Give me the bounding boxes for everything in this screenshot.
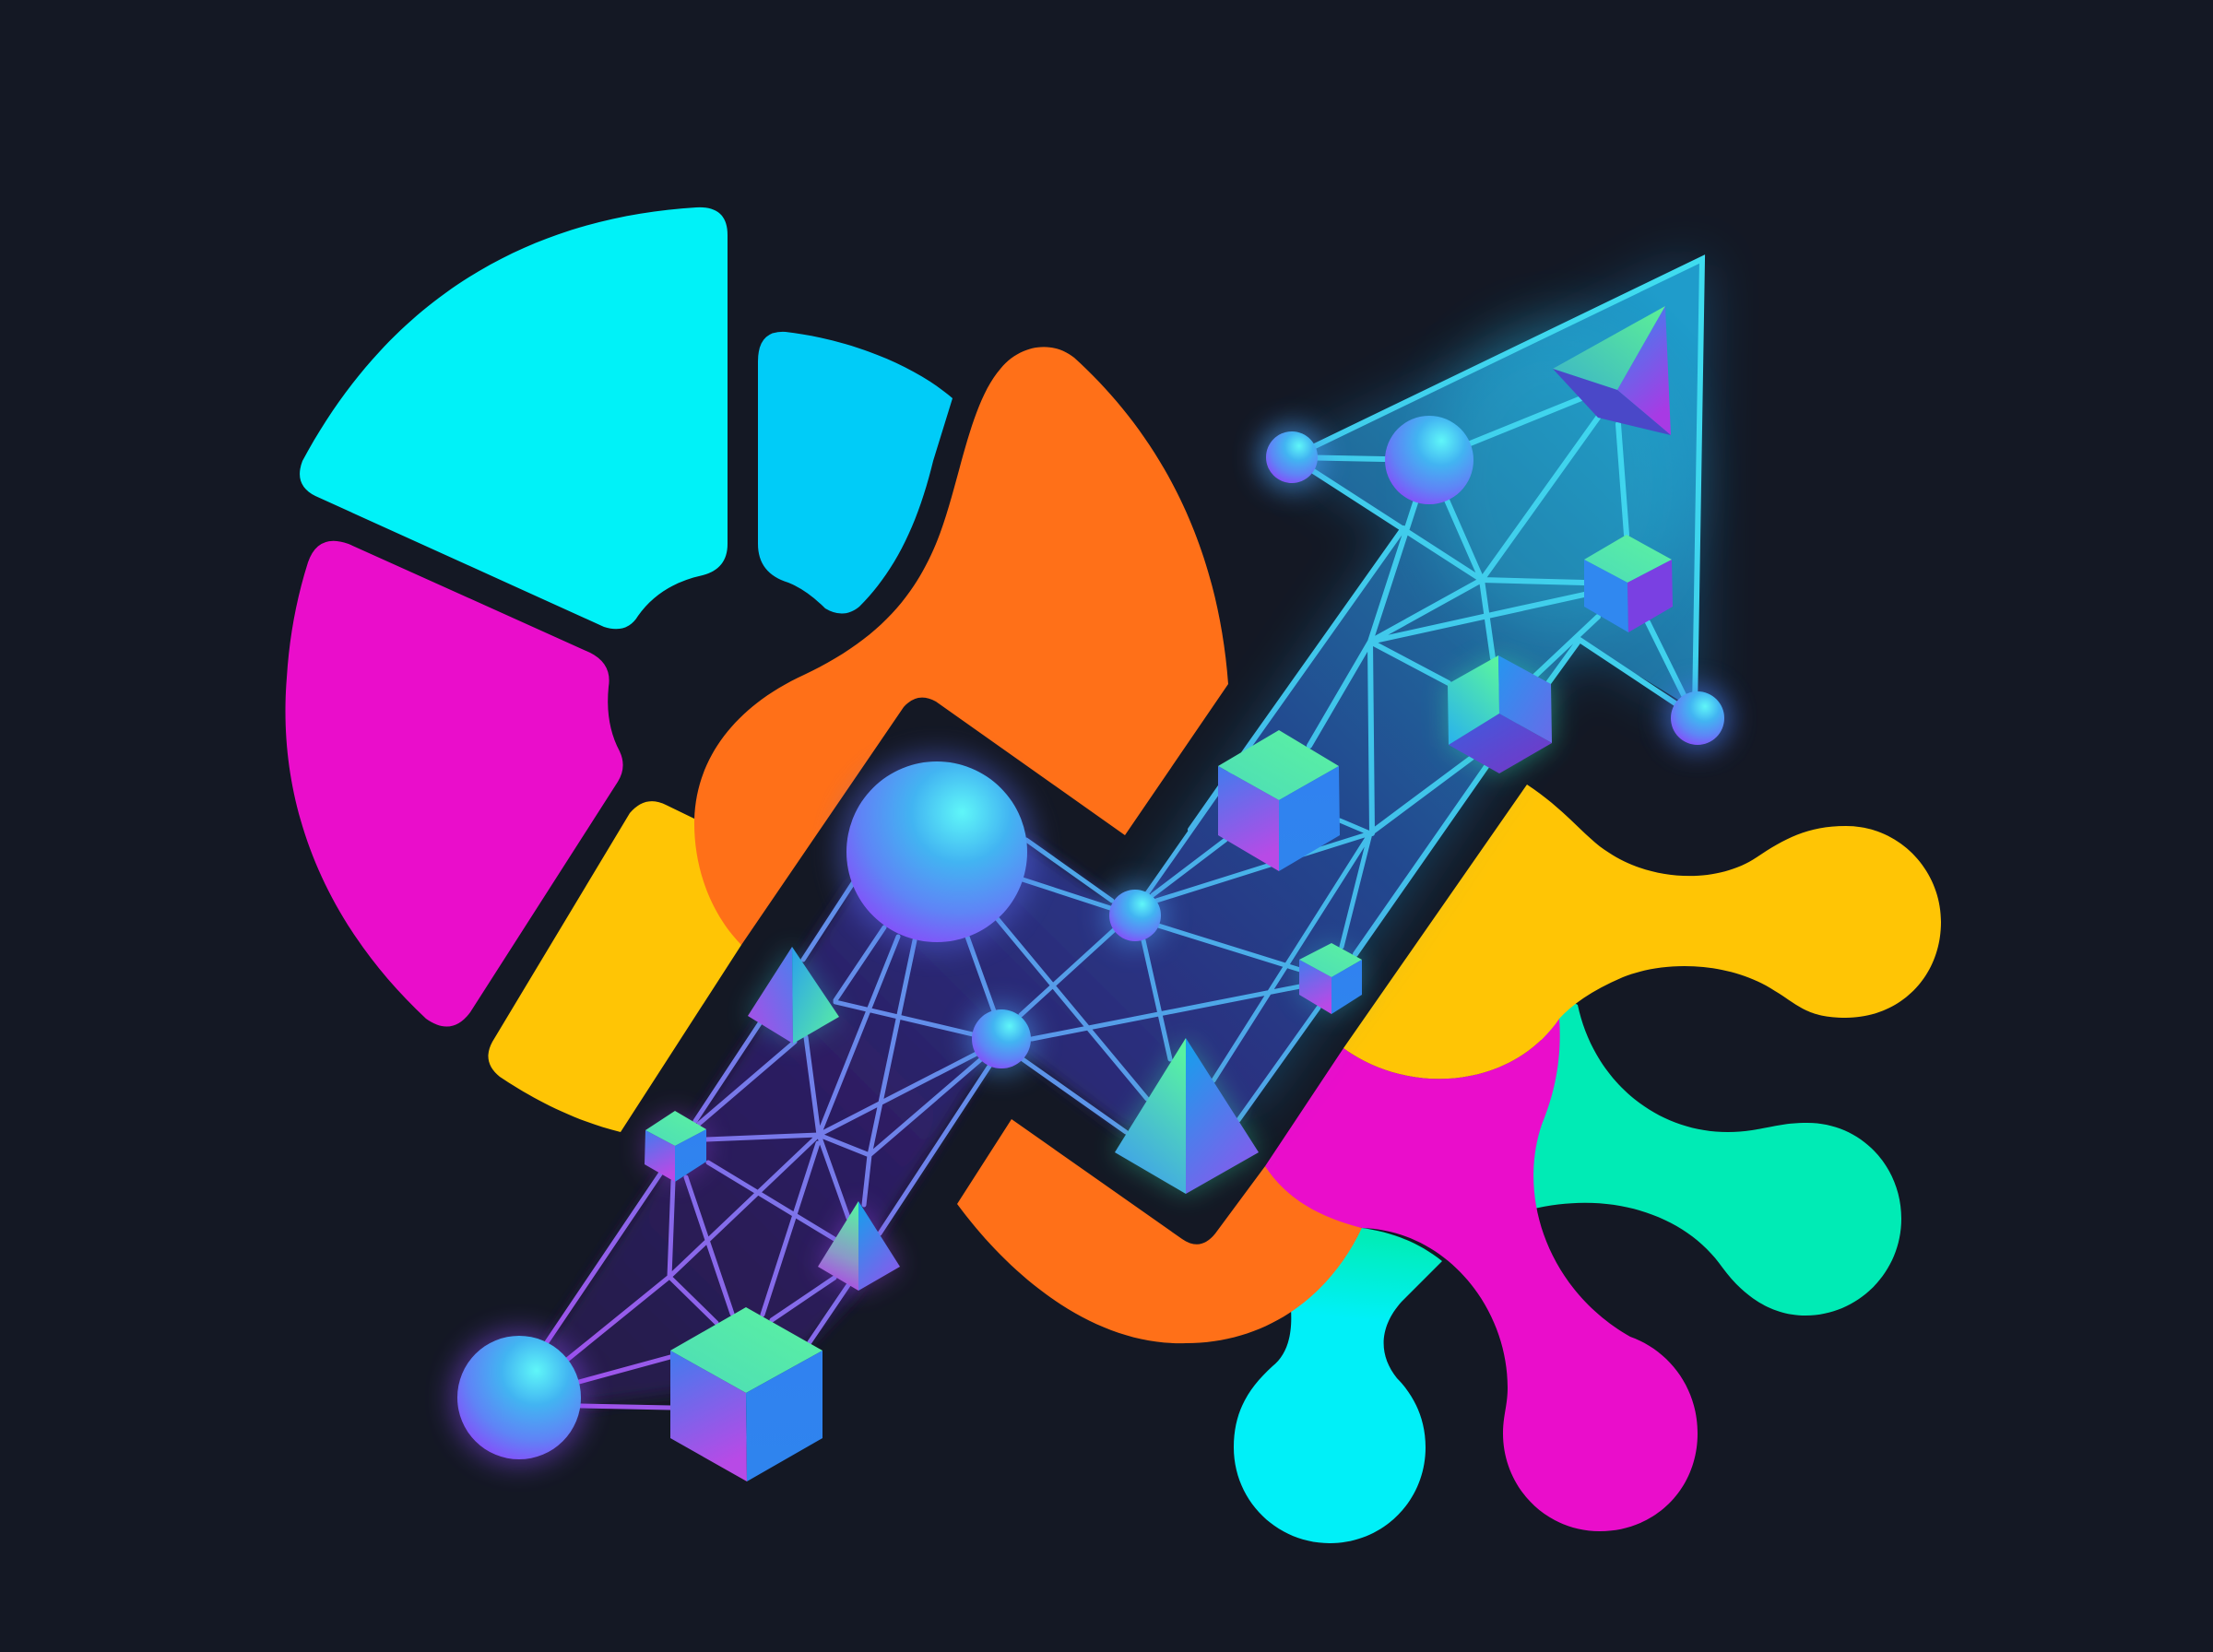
pie segment: sky blue (758, 332, 953, 614)
pyramid: large glowing (1115, 1038, 1259, 1194)
cube: small lower left (645, 1111, 706, 1182)
network arrow (451, 259, 1731, 1481)
pie segment: magenta (286, 541, 623, 1027)
blob branch: cyan (1234, 1228, 1442, 1543)
cube: large tail (670, 1307, 822, 1481)
pie chart segments (286, 207, 953, 1132)
blob branch: teal (1512, 991, 1901, 1316)
arrow body soft fill (547, 840, 1291, 1406)
cube: small right (1299, 943, 1362, 1014)
sphere: middle node (1104, 884, 1166, 947)
pyramid: arrow tip (1553, 306, 1671, 435)
sphere: large central (837, 752, 1036, 951)
cube: head right (1584, 535, 1673, 632)
sphere: lower node (966, 1004, 1036, 1074)
highlight in arrow head (1429, 323, 1687, 636)
cube: glowing middle (1448, 655, 1552, 773)
arrow head fill (1135, 259, 1702, 1120)
network lines: body and tail (547, 792, 1370, 1408)
pyramid: upper left (748, 947, 839, 1044)
orange ribbon: upper (694, 347, 1228, 945)
pyramid: lower (818, 1201, 900, 1291)
blob branch: yellow (1343, 785, 1941, 1079)
sphere: head left (1259, 424, 1325, 490)
arrow head glow (1135, 259, 1702, 1120)
sphere: arrow tail (451, 1329, 587, 1466)
sphere: head centre (1385, 416, 1473, 504)
network lines: head (1190, 259, 1702, 954)
orange ribbon: lower (957, 1119, 1362, 1343)
pie segment: yellow (489, 801, 741, 1132)
blob branch: magenta (1265, 1019, 1698, 1531)
pie segment: cyan (300, 207, 728, 629)
sphere: head right (1664, 685, 1731, 751)
cube: upper body (1218, 730, 1340, 871)
blob branches (957, 785, 1941, 1543)
